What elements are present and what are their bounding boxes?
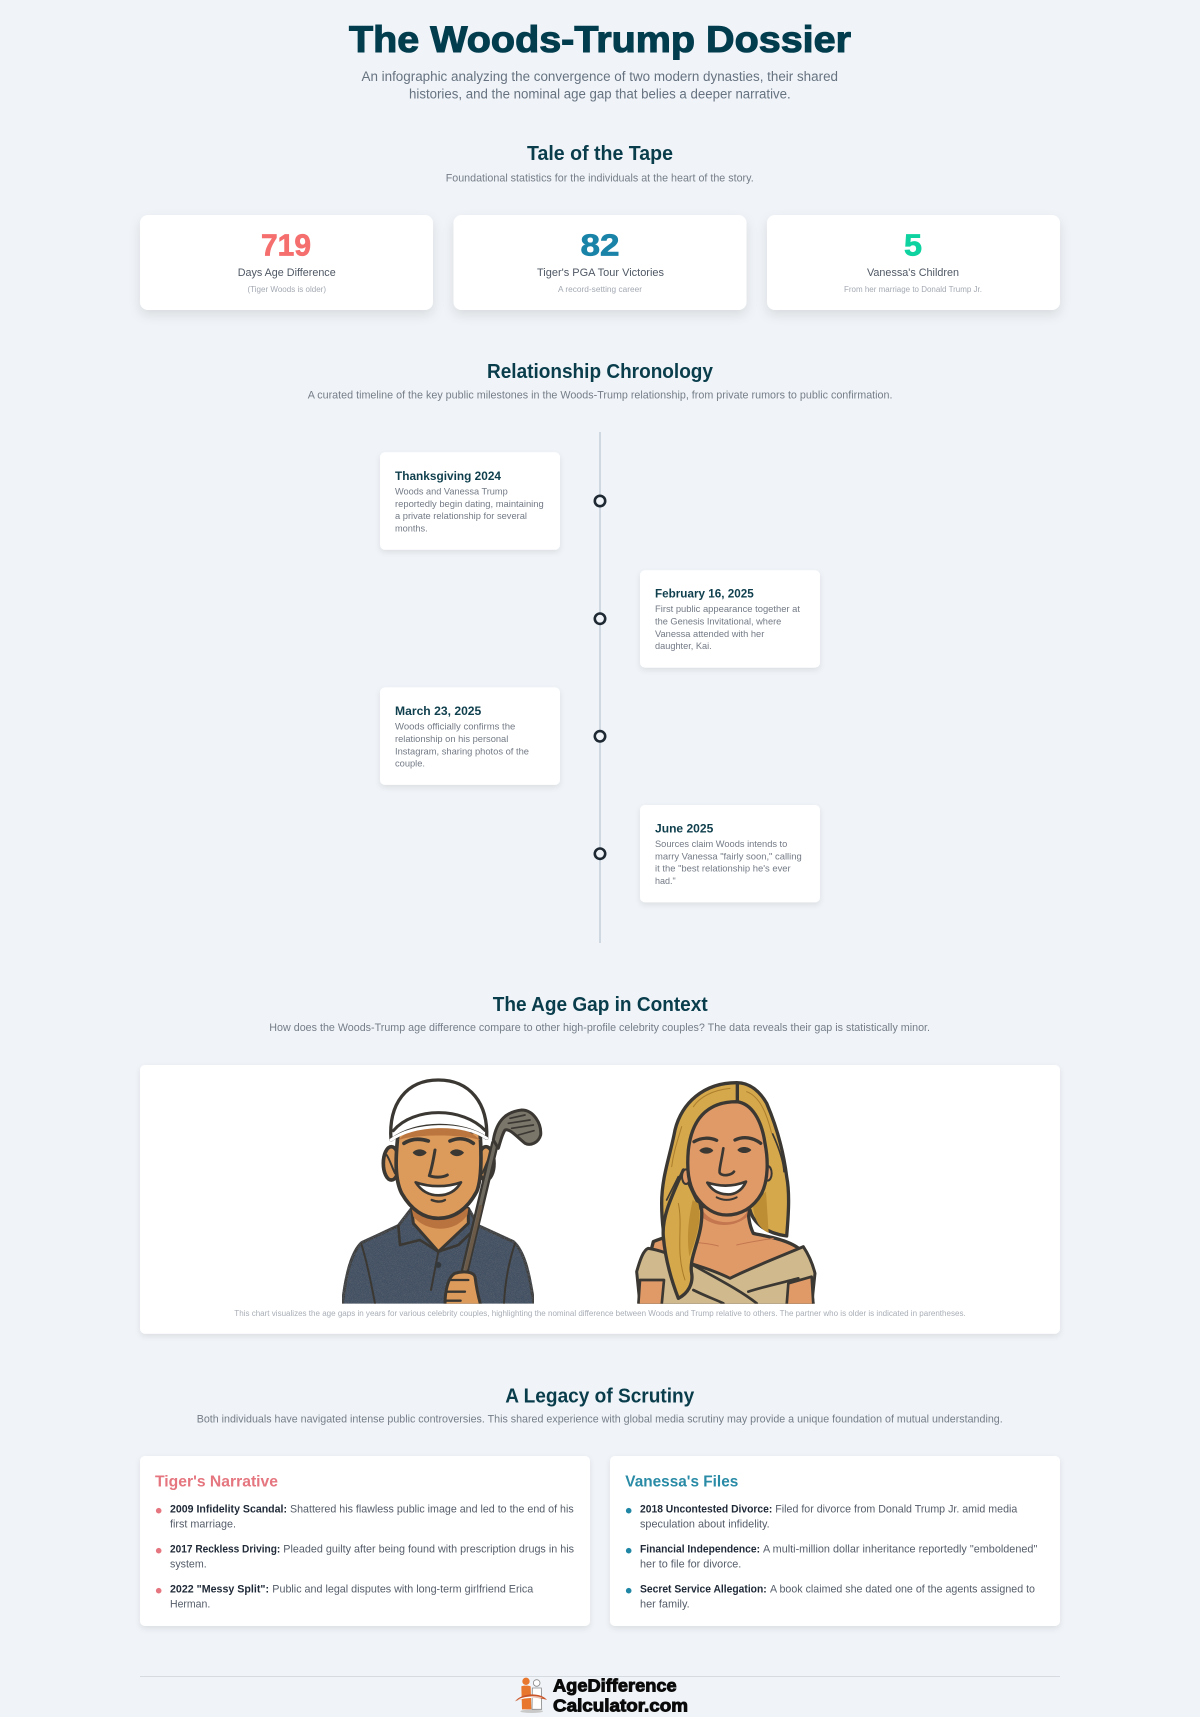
panel: age gap illustration — [140, 1065, 1060, 1334]
illustration: Tiger Woods with golf club — [342, 1080, 541, 1305]
panel: Vanessa's Files: Filed for divorce from Donald Trump Jr. amid media — [775, 1504, 1017, 1516]
footer logo — [515, 1676, 688, 1716]
illustration: Vanessa Trump — [637, 1083, 815, 1305]
timeline card: Thanksgiving 2024: Thanksgiving 2024 — [395, 469, 501, 483]
timeline card: March 23, 2025: March 23, 2025 — [395, 704, 482, 718]
stat card: Vanessa's children: Vanessa's Children — [867, 267, 959, 279]
section heading: A Legacy of Scrutiny: A Legacy of Scrutiny — [505, 1386, 695, 1408]
stat card: days age difference — [140, 215, 433, 310]
logo wordmark: AgeDifference — [553, 1676, 677, 1696]
timeline card: February 16, 2025: daughter, Kai. — [655, 640, 712, 651]
timeline card: June 2025: marry Vanessa "fairly soon," calling — [655, 850, 802, 861]
timeline card: Thanksgiving 2024: months. — [395, 522, 428, 534]
panel: Tiger's Narrative: 2017 Reckless Driving: — [170, 1544, 280, 1556]
panel: Tiger's Narrative: Tiger's Narrative — [155, 1474, 278, 1491]
stat card: Vanessa's children: From her marriage to Donald Trump Jr. — [844, 285, 982, 294]
panel: Vanessa's Files — [610, 1456, 1060, 1626]
timeline card: Thanksgiving 2024 — [380, 452, 560, 550]
section heading: Relationship Chronology: Relationship Chronology — [487, 361, 714, 383]
section heading: Tale of the Tape — [446, 143, 754, 184]
timeline card: March 23, 2025: relationship on his personal — [395, 733, 508, 744]
panel: Tiger's Narrative: system. — [170, 1559, 207, 1571]
panel: Tiger's Narrative: 2022 "Messy Split": — [170, 1584, 269, 1596]
stat card: PGA tour victories: 82 — [580, 229, 620, 263]
section heading: Tale of the Tape: Tale of the Tape — [527, 143, 673, 165]
panel: Tiger's Narrative: Shattered his flawless public image and led to the end of his — [290, 1504, 574, 1516]
panel: Vanessa's Files: her family. — [640, 1599, 690, 1611]
timeline card: March 23, 2025: couple. — [395, 758, 425, 769]
section heading: A Legacy of Scrutiny — [197, 1386, 1003, 1425]
timeline axis — [595, 432, 605, 943]
panel: Vanessa's Files: her to file for divorce. — [640, 1559, 741, 1571]
stat card: days age difference: (Tiger Woods is older) — [248, 285, 326, 294]
timeline card: June 2025: it the "best relationship he's ever — [655, 863, 791, 874]
section heading: Relationship Chronology — [308, 361, 892, 402]
timeline card: March 23, 2025 — [380, 687, 560, 785]
logo wordmark — [553, 1676, 688, 1716]
icon: two figures — [515, 1678, 547, 1713]
timeline card: February 16, 2025: February 16, 2025 — [655, 587, 754, 601]
section heading: The Age Gap in Context — [269, 994, 930, 1034]
chart caption: This chart visualizes the age gaps in years for various celebrity couples, highlighting the nominal difference between Woods and Trump relative to others. The partner who is older is indicated in parentheses. — [234, 1309, 966, 1318]
timeline card: June 2025: had." — [655, 875, 676, 886]
logo wordmark: Calculator.com — [553, 1696, 688, 1716]
timeline card: Thanksgiving 2024: reportedly begin dating, maintaining — [395, 498, 544, 509]
timeline card: March 23, 2025: Instagram, sharing photos of the — [395, 745, 529, 756]
panel: Tiger's Narrative: 2009 Infidelity Scandal: — [170, 1504, 287, 1516]
subtitle — [362, 69, 838, 101]
section heading: Relationship Chronology: A curated timeline of the key public milestones in the Woods-Trump relationship, from private rumors to public confirmation. — [308, 390, 892, 402]
panel: Vanessa's Files: 2018 Uncontested Divorce: — [640, 1504, 772, 1516]
subtitle: histories, and the nominal age gap that belies a deeper narrative. — [409, 86, 791, 101]
panel: Vanessa's Files: Vanessa's Files — [625, 1474, 738, 1491]
timeline card: June 2025 — [640, 805, 820, 902]
panel: Vanessa's Files: A multi-million dollar inheritance reportedly "emboldened" — [763, 1544, 1037, 1556]
section heading: The Age Gap in Context: The Age Gap in Context — [493, 994, 708, 1016]
timeline card: February 16, 2025: the Genesis Invitational, where — [655, 615, 781, 626]
timeline card: June 2025: June 2025 — [655, 822, 714, 836]
panel: Tiger's Narrative: Public and legal disputes with long-term girlfriend Erica — [272, 1584, 533, 1596]
title: The Woods-Trump Dossier — [349, 19, 851, 60]
panel: Tiger's Narrative: first marriage. — [170, 1519, 236, 1531]
panel: Tiger's Narrative — [140, 1456, 590, 1626]
stat card: PGA tour victories — [454, 215, 746, 310]
timeline card: March 23, 2025: Woods officially confirms the — [395, 720, 515, 731]
stat card: Vanessa's children — [767, 215, 1060, 310]
timeline card: February 16, 2025: First public appearance together at — [655, 603, 800, 614]
section heading: The Age Gap in Context: How does the Woods-Trump age difference compare to other high-profile celebrity couples? The data reveals their gap is statistically minor. — [269, 1022, 930, 1034]
section heading: A Legacy of Scrutiny: Both individuals have navigated intense public controversies. This shared experience with global media scrutiny may provide a unique foundation of mutual understanding. — [197, 1413, 1003, 1425]
stat card: PGA tour victories: A record-setting career — [558, 285, 642, 294]
panel: Vanessa's Files: speculation about infidelity. — [640, 1519, 770, 1531]
panel: Vanessa's Files: Financial Independence: — [640, 1544, 760, 1556]
section heading: Tale of the Tape: Foundational statistics for the individuals at the heart of the story. — [446, 172, 754, 184]
panel: Tiger's Narrative: Herman. — [170, 1599, 210, 1611]
timeline card: Thanksgiving 2024: Woods and Vanessa Trump — [395, 485, 508, 496]
stat card: days age difference: Days Age Difference — [238, 267, 336, 279]
timeline card: June 2025: Sources claim Woods intends to — [655, 838, 787, 849]
stat card: days age difference: 719 — [261, 229, 311, 263]
subtitle: An infographic analyzing the convergence of two modern dynasties, their shared — [362, 69, 838, 84]
panel: Tiger's Narrative: Pleaded guilty after being found with prescription drugs in his — [283, 1544, 575, 1556]
stat card: Vanessa's children: 5 — [904, 229, 922, 263]
timeline card: February 16, 2025 — [640, 570, 820, 668]
timeline card: Thanksgiving 2024: a private relationship for several — [395, 510, 527, 521]
stat card: PGA tour victories: Tiger's PGA Tour Victories — [537, 267, 664, 279]
panel: Vanessa's Files: Secret Service Allegation: — [640, 1584, 767, 1596]
panel: Vanessa's Files: A book claimed she dated one of the agents assigned to — [770, 1584, 1035, 1596]
timeline card: February 16, 2025: Vanessa attended with her — [655, 628, 764, 639]
